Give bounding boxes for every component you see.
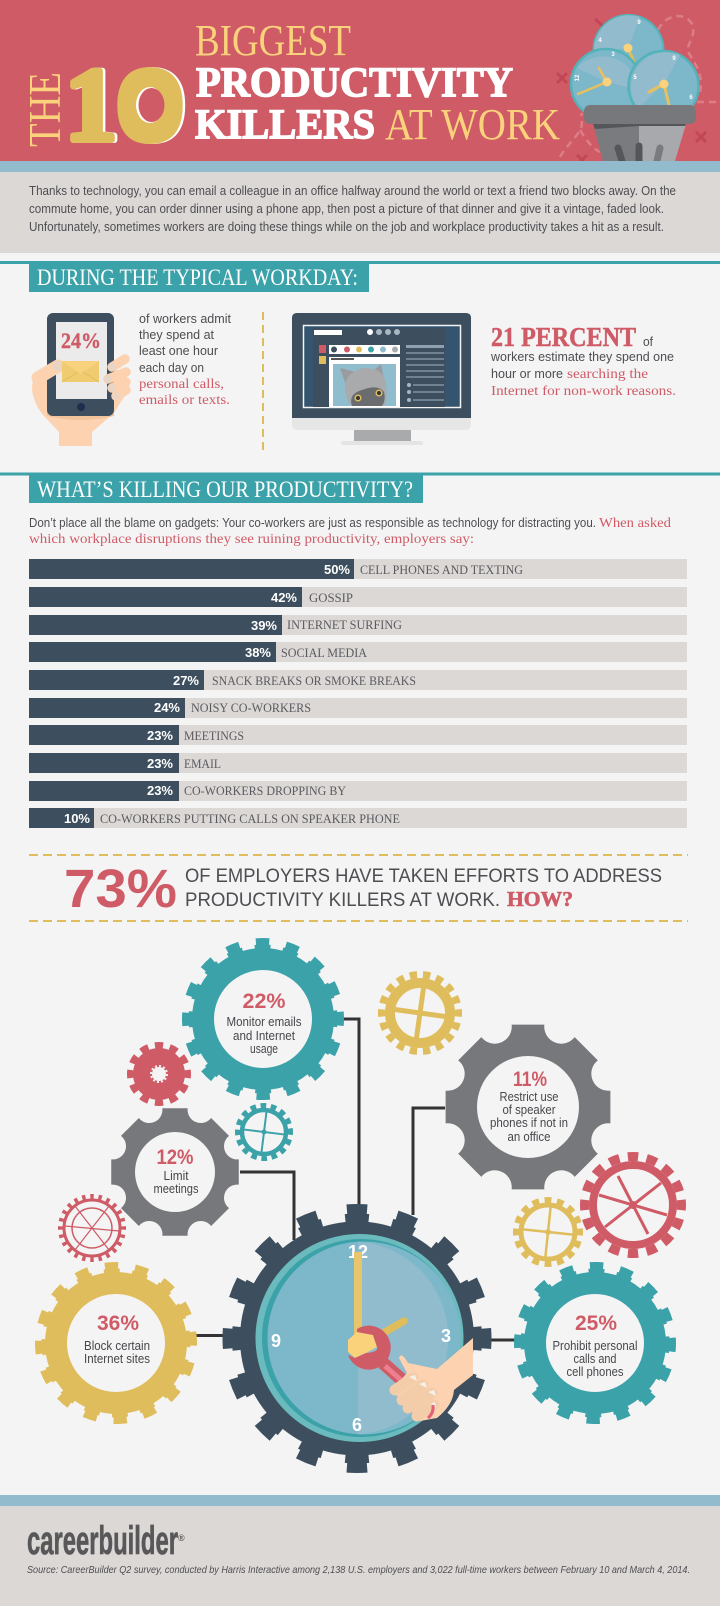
gear: teal 22%: [186, 942, 340, 1096]
bar: cell phones: 50%: [324, 562, 350, 577]
footer panel: [0, 1506, 720, 1606]
monitor text: searching the: [567, 367, 648, 382]
callout: 73%: OF EMPLOYERS HAVE TAKEN EFFORTS TO ADDRESS: [185, 865, 662, 887]
bar: internet surfing: [29, 615, 687, 635]
bar: meetings: [29, 725, 687, 745]
gear: teal 25%: calls and: [574, 1352, 617, 1366]
gear: teal 22%: and Internet: [233, 1029, 295, 1043]
title: 10: [65, 46, 186, 163]
bar: email: [29, 753, 687, 773]
phone stat: 24%: 24%: [61, 328, 101, 353]
icon: clocks in a pot: 6: [689, 95, 693, 101]
icon: envelope: [62, 361, 99, 382]
bar: noisy co-workers: [29, 698, 687, 718]
gear: gray 11%: 11%: [513, 1068, 547, 1091]
gear: gray 11%: an office: [508, 1130, 551, 1144]
wheel: thin red: [60, 1196, 124, 1260]
bar: snack breaks: [29, 670, 687, 690]
gear: yellow 36%: [35, 1262, 197, 1424]
monitor text: of: [643, 334, 653, 349]
bar: snack breaks: 27%: [173, 673, 199, 688]
logo: careerbuilder: careerbuilder: [27, 1519, 178, 1563]
clock numerals: 6: [352, 1415, 362, 1435]
gear: teal 25%: cell phones: [566, 1365, 624, 1379]
callout: 73%: PRODUCTIVITY KILLERS AT WORK.: [185, 889, 500, 911]
wrench in hand: [348, 1326, 473, 1421]
section heading: during the typical workday: DURING THE TYPICAL WORKDAY:: [37, 265, 358, 290]
bar: social media: 38%: [245, 645, 271, 660]
gear: gray 11%: [446, 1025, 610, 1189]
bar: social media: SOCIAL MEDIA: [281, 646, 367, 660]
clock numerals: 3: [441, 1326, 451, 1346]
bar: snack breaks: SNACK BREAKS OR SMOKE BREAKS: [212, 674, 416, 688]
bar: speaker phone: 10%: [64, 811, 90, 826]
gear: teal 25%: Prohibit personal: [552, 1339, 638, 1353]
wheel: big red: [584, 1156, 682, 1254]
bar chart intro text: Don’t place all the blame on gadgets: Your co-workers are just as responsible as technology for distracting you.: [29, 515, 596, 530]
bar chart: [29, 559, 687, 828]
gear: gray 11%: Restrict use: [500, 1090, 559, 1104]
phone text: [139, 311, 231, 408]
bar: email: EMAIL: [184, 757, 221, 771]
blue band footer: [0, 1495, 720, 1506]
section heading: what's killing our productivity: WHAT’S KILLING OUR PRODUCTIVITY?: [37, 477, 413, 502]
phone text: they spend at: [139, 327, 214, 342]
section heading: what's killing our productivity: [0, 472, 720, 503]
blue band: [0, 161, 720, 172]
title: 10: 1: [67, 46, 120, 163]
icon: clocks in a pot: [557, 15, 720, 165]
wheel: yellow top: [382, 974, 458, 1052]
title: at work: AT WORK: [385, 100, 560, 149]
gear: yellow 36%: 36%: [97, 1312, 139, 1335]
icon: monitor with cat: [292, 313, 471, 445]
bar: social media: [29, 642, 687, 662]
bar: co-workers dropping by: CO-WORKERS DROPPING BY: [184, 784, 346, 798]
clock hands: [354, 1252, 404, 1336]
bar: speaker phone: [29, 808, 687, 828]
bar: gossip: 42%: [271, 590, 297, 605]
gear: gray 12%: 12%: [156, 1146, 194, 1169]
clock numerals: [271, 1242, 451, 1435]
title: biggest: BIGGEST: [195, 16, 351, 65]
logo: careerbuilder: [27, 1519, 185, 1563]
title: the: THE: [20, 72, 70, 147]
phone text: least one hour: [139, 343, 219, 358]
callout: 73%: 73%: [64, 859, 177, 919]
gear: yellow 36%: Block certain: [84, 1339, 150, 1353]
title: 10: 0: [118, 46, 186, 163]
intro panel: [0, 172, 720, 253]
title: productivity: PRODUCTIVITY: [196, 60, 513, 106]
gear: teal 25%: [515, 1263, 675, 1423]
icon: hand holding phone: [32, 313, 127, 446]
gear: gray 11%: phones if not in: [490, 1116, 568, 1130]
title: 10: 0: [116, 46, 184, 163]
gear: teal 25%: 25%: [575, 1312, 617, 1335]
bar: email: 23%: [147, 756, 173, 771]
connector lines: [195, 1019, 516, 1340]
bar: meetings: 23%: [147, 728, 173, 743]
icon: clocks in a pot: 4: [598, 38, 602, 44]
icon: clocks in a pot: 9: [672, 56, 676, 62]
logo: careerbuilder: ®: [178, 1533, 185, 1543]
gear: teal 22%: 22%: [242, 990, 286, 1013]
bar chart intro text: [29, 515, 671, 547]
title: killers: KILLERS: [195, 102, 375, 148]
bar chart intro text: When asked: [599, 516, 671, 531]
bar chart intro text: which workplace disruptions they see ruining productivity, employers say:: [29, 532, 474, 547]
phone text: personal calls,: [139, 377, 224, 392]
bar: internet surfing: INTERNET SURFING: [287, 618, 402, 632]
phone text: each day on: [139, 360, 204, 375]
bar: internet surfing: 39%: [251, 618, 277, 633]
header banner: [0, 0, 720, 165]
callout: 73%: HOW?: [507, 887, 573, 911]
bar: noisy co-workers: NOISY CO-WORKERS: [191, 701, 311, 715]
icon: clocks in a pot: 12: [575, 74, 581, 81]
bar: cell phones: [29, 559, 687, 579]
gear: gray 12%: Limit: [164, 1169, 189, 1183]
monitor text: workers estimate they spend one: [490, 349, 674, 364]
gear: gray 12%: meetings: [154, 1182, 198, 1196]
title: 10: 1: [65, 46, 117, 163]
bar: co-workers dropping by: [29, 781, 687, 801]
gear: yellow 36%: Internet sites: [84, 1352, 150, 1366]
wheel: yellow lower: [516, 1200, 580, 1264]
bar: speaker phone: CO-WORKERS PUTTING CALLS ON SPEAKER PHONE: [100, 812, 400, 826]
intro panel: Unfortunately, sometimes workers are doing these things while on the job and workplace productivity takes a hit as a result.: [29, 219, 664, 234]
icon: clocks in a pot: 5: [633, 75, 637, 81]
intro panel: commute home, you can order dinner using a phone app, then post a picture of that dinner and give it a vintage, faded look.: [29, 201, 664, 216]
bar: gossip: GOSSIP: [309, 591, 353, 605]
gear: small red: [130, 1046, 188, 1102]
monitor text: [490, 322, 676, 399]
clock numerals: 12: [348, 1242, 368, 1262]
gear: teal 22%: usage: [250, 1042, 278, 1056]
section heading: during the typical workday: [0, 261, 720, 292]
main clock gear: [228, 1209, 486, 1468]
bar: gossip: [29, 587, 687, 607]
bar: cell phones: CELL PHONES AND TEXTING: [360, 563, 523, 577]
gear: gray 12%: [111, 1108, 239, 1236]
monitor text: hour or more: [491, 366, 563, 381]
callout: 73%: [64, 859, 662, 919]
icon: clocks in a pot: 9: [637, 20, 641, 26]
bar: co-workers dropping by: 23%: [147, 783, 173, 798]
monitor text: Internet for non-work reasons.: [491, 384, 676, 399]
wheel: small teal: [238, 1106, 290, 1158]
bar: meetings: MEETINGS: [184, 729, 244, 743]
phone text: emails or texts.: [139, 393, 230, 408]
monitor text: 21 PERCENT: [491, 322, 636, 352]
clock numerals: 9: [271, 1331, 281, 1351]
icon: clocks in a pot: 3: [611, 52, 615, 58]
gear: teal 22%: Monitor emails: [226, 1015, 302, 1029]
bar: noisy co-workers: 24%: [154, 700, 180, 715]
gear: gray 11%: of speaker: [502, 1103, 556, 1117]
phone text: of workers admit: [139, 311, 231, 326]
